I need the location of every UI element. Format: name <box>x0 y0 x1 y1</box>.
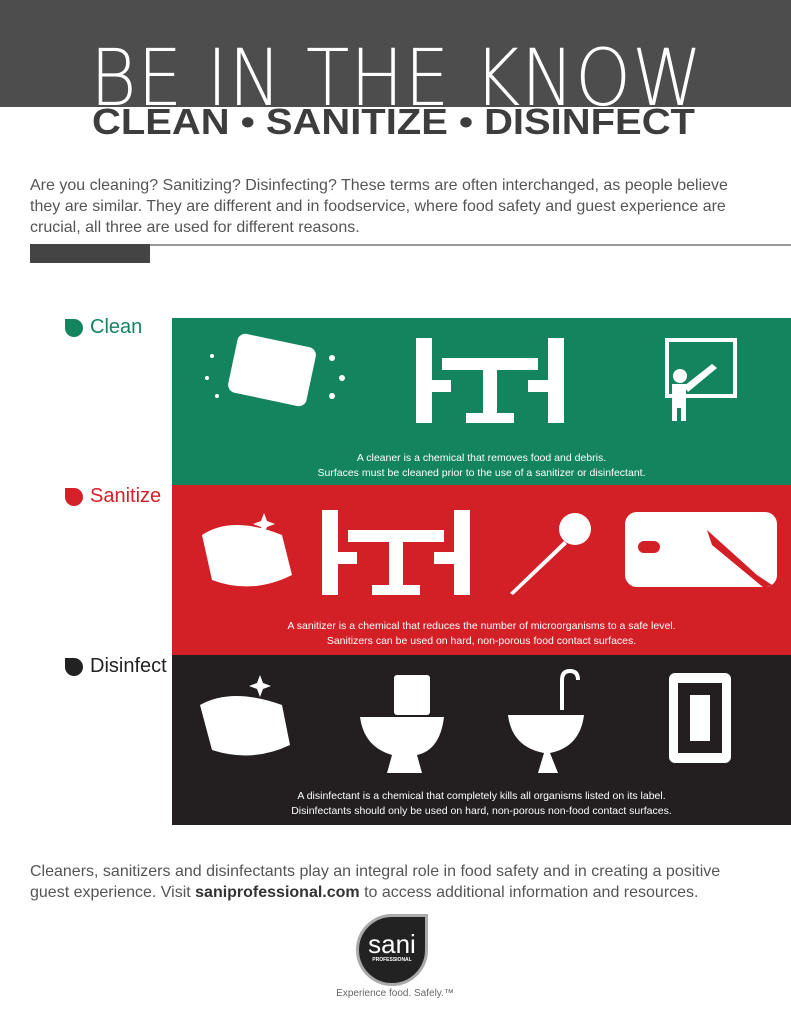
label: sanitize: Sanitize <box>90 485 161 507</box>
icon: toilet <box>360 675 444 773</box>
closing paragraph: Cleaners, sanitizers and disinfectants play an integral role in food safety and in creating a positive <box>30 863 720 880</box>
icon: person wiping board <box>667 340 735 421</box>
title: be in the know: BE IN THE KNOW <box>90 34 703 124</box>
caption: disinfect <box>291 790 672 817</box>
closing paragraph: guest experience. Visit saniprofessional.com to access additional information and resources. <box>30 884 698 901</box>
caption: sanitize: A sanitizer is a chemical that reduces the number of microorganisms to a safe level. <box>287 620 676 632</box>
caption: clean: Surfaces must be cleaned prior to the use of a sanitizer or disinfectant. <box>317 467 646 479</box>
logo <box>356 914 428 986</box>
caption: clean <box>317 452 646 479</box>
intro paragraph: crucial, all three are used for different reasons. <box>30 219 360 236</box>
icon: table and chairs <box>416 338 564 423</box>
icon: cutting board and knife <box>625 512 777 588</box>
icon: wiping hand <box>205 332 345 408</box>
closing paragraph <box>30 863 720 901</box>
header band <box>0 0 791 107</box>
icon: thermometer <box>510 513 591 595</box>
divider bar <box>30 244 791 263</box>
panel: disinfect <box>172 655 791 825</box>
intro paragraph: they are similar. They are different and in foodservice, where food safety and guest experience are <box>30 198 726 215</box>
icon: wiping cloth <box>200 675 290 755</box>
icon: light switch <box>669 673 731 763</box>
caption: sanitize <box>287 620 676 647</box>
tagline: Experience food. Safely.™ <box>336 988 454 999</box>
label: disinfect: Disinfect <box>90 655 167 677</box>
panel: sanitize <box>172 485 791 655</box>
caption: sanitize: Sanitizers can be used on hard, non-porous food contact surfaces. <box>327 635 636 647</box>
label: clean <box>65 316 142 338</box>
label: clean: Clean <box>90 316 142 338</box>
caption: clean: A cleaner is a chemical that removes food and debris. <box>357 452 606 464</box>
caption: disinfect: Disinfectants should only be used on hard, non-porous non-food contact surfaces. <box>291 805 672 817</box>
subtitle: CLEAN • SANITIZE • DISINFECT <box>92 101 695 142</box>
caption: disinfect: A disinfectant is a chemical that completely kills all organisms listed on its label. <box>297 790 666 802</box>
icon: table and chairs <box>322 510 470 595</box>
logo: PROFESSIONAL <box>372 957 412 963</box>
icon: wiping cloth <box>202 513 292 586</box>
intro paragraph <box>30 177 728 236</box>
panel: clean <box>172 318 791 485</box>
intro paragraph: Are you cleaning? Sanitizing? Disinfecting? These terms are often interchanged, as people believe <box>30 177 728 194</box>
logo: sani <box>368 929 416 959</box>
icon: sink <box>508 671 584 773</box>
